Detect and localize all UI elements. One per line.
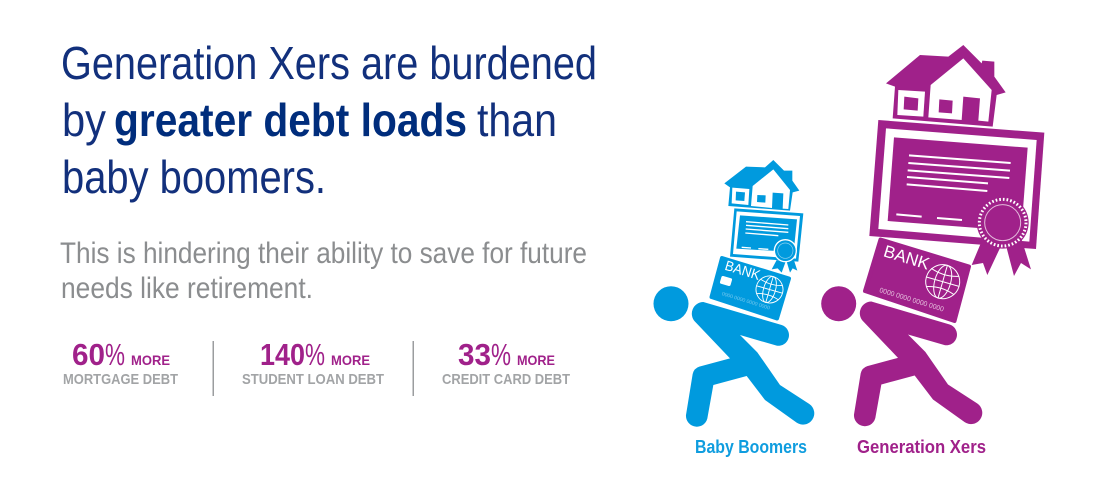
label: generation xers: Generation Xers bbox=[857, 437, 986, 457]
icon: purple diploma bbox=[869, 120, 1044, 276]
icon: blue credit card: 0000 0000 0000 0000 bbox=[721, 291, 771, 312]
icon: blue person bbox=[654, 286, 814, 427]
stat: student loan debt bbox=[242, 337, 384, 388]
icon: blue house bbox=[724, 160, 799, 211]
icon: blue credit card bbox=[712, 257, 789, 318]
figure: generation xers bbox=[821, 45, 1044, 426]
title: greater debt loads bbox=[114, 94, 467, 146]
title: than bbox=[477, 94, 557, 146]
subtitle: needs like retirement. bbox=[61, 272, 313, 305]
stat: student loan debt: % bbox=[305, 337, 325, 372]
stat: student loan debt: 140 bbox=[260, 337, 305, 372]
label: baby boomers: Baby Boomers bbox=[695, 437, 807, 457]
subtitle: This is hindering their ability to save for future bbox=[60, 237, 587, 270]
icon: purple credit card: 0000 0000 0000 0000 bbox=[878, 287, 945, 314]
stat: mortgage debt: 60 bbox=[72, 337, 105, 372]
stat: credit card debt bbox=[442, 337, 570, 388]
figure: baby boomers bbox=[654, 160, 814, 427]
stat: credit card debt: 33 bbox=[458, 337, 491, 372]
title: baby boomers. bbox=[62, 151, 326, 203]
stat: mortgage debt: MORTGAGE DEBT bbox=[63, 371, 178, 388]
subtitle bbox=[60, 237, 587, 305]
icon: purple credit card: BANK bbox=[881, 242, 932, 274]
stat: mortgage debt: % bbox=[105, 337, 125, 372]
icon: purple person bbox=[821, 286, 982, 426]
title: Generation Xers are burdened bbox=[61, 37, 597, 89]
stat: mortgage debt: MORE bbox=[131, 352, 170, 368]
title bbox=[61, 37, 597, 203]
icon: blue diploma bbox=[730, 208, 803, 273]
icon: purple credit card bbox=[865, 240, 969, 321]
title: by bbox=[62, 94, 106, 146]
stat: credit card debt: CREDIT CARD DEBT bbox=[442, 371, 570, 388]
icon: blue credit card: BANK bbox=[723, 257, 763, 283]
stat: mortgage debt bbox=[63, 337, 178, 388]
stat: student loan debt: STUDENT LOAN DEBT bbox=[242, 371, 384, 388]
stat: credit card debt: MORE bbox=[517, 352, 555, 368]
stat: credit card debt: % bbox=[491, 337, 511, 372]
icon: purple house bbox=[886, 45, 1006, 127]
stat: student loan debt: MORE bbox=[331, 352, 370, 368]
